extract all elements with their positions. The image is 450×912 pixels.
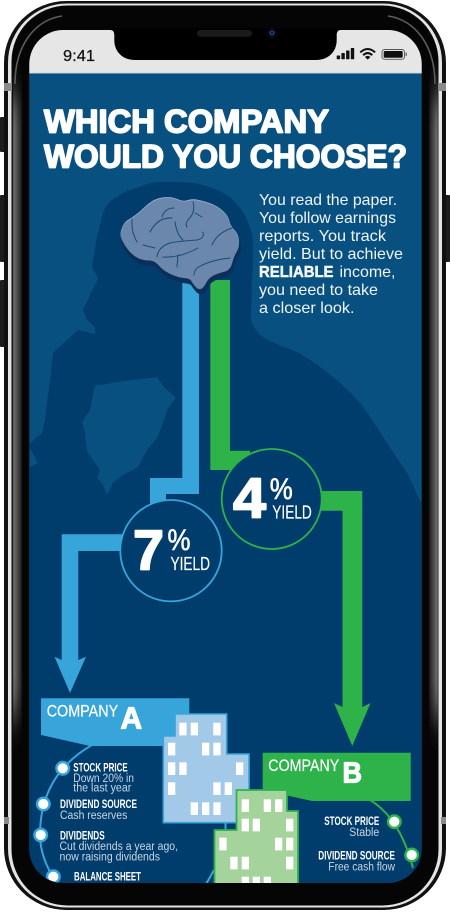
company B timeline nodes <box>388 815 418 861</box>
company A details <box>60 763 178 883</box>
company B details: Stable <box>349 827 379 839</box>
company B details <box>318 816 396 873</box>
7% yield badge: % <box>168 524 190 557</box>
company A connector arc <box>40 745 226 888</box>
building B <box>214 790 298 890</box>
intro text: reports. You track <box>259 228 387 245</box>
speaker <box>197 30 252 37</box>
notch <box>110 28 341 60</box>
company A details: BALANCE SHEET <box>74 871 141 883</box>
company A details: Cash reserves <box>60 810 128 822</box>
brain <box>121 198 240 293</box>
company B banner: B <box>342 757 362 789</box>
title: WOULD YOU CHOOSE? <box>44 139 407 175</box>
title <box>43 108 406 169</box>
silhouette of thinking man <box>28 182 423 884</box>
4% yield badge <box>222 449 322 549</box>
intro text: income, <box>340 264 396 281</box>
company A details: the last year <box>73 782 131 794</box>
company A details: now raising dividends <box>60 852 160 864</box>
company B connector arc <box>370 800 413 868</box>
intro text: a closer look. <box>259 300 354 317</box>
4% yield badge: 4 <box>233 467 266 531</box>
building A <box>163 714 249 823</box>
company A details: STOCK PRICE <box>73 763 128 775</box>
status bar <box>29 30 422 74</box>
intro text: you need to take <box>259 282 378 299</box>
company B details: STOCK PRICE <box>324 816 380 828</box>
company A timeline nodes <box>34 762 69 883</box>
company A banner: COMPANY <box>47 702 118 720</box>
company B banner <box>263 753 411 801</box>
7% yield badge: YIELD <box>170 553 210 574</box>
intro text: yield. But to achieve <box>259 246 403 263</box>
intro text: You follow earnings <box>259 210 396 227</box>
7% yield badge: 7 <box>133 518 164 582</box>
7% yield badge <box>120 500 222 601</box>
camera <box>267 28 277 38</box>
company A details: Cut dividends a year ago, <box>60 841 178 853</box>
signal icon <box>337 48 354 59</box>
green arrow to company B <box>321 491 370 746</box>
green path to 4% yield <box>210 280 250 470</box>
4% yield badge: % <box>270 473 293 506</box>
intro text: RELIABLE <box>259 264 334 281</box>
intro text: You read the paper. <box>259 192 397 209</box>
blue arrow to company A <box>54 534 130 693</box>
company B details: Free cash flow <box>328 861 396 873</box>
title: WHICH COMPANY <box>44 104 329 140</box>
company B details: DIVIDEND SOURCE <box>318 850 395 862</box>
company A banner: A <box>120 702 142 736</box>
company B banner: COMPANY <box>268 757 339 775</box>
wifi icon <box>360 49 375 60</box>
4% yield badge: YIELD <box>272 501 312 522</box>
company A details: DIVIDENDS <box>60 830 105 842</box>
intro text <box>259 192 403 317</box>
company A details: Down 20% in <box>73 773 134 785</box>
clock: 9:41 <box>63 48 95 65</box>
battery icon <box>382 50 407 59</box>
company A details: DIVIDEND SOURCE <box>60 799 137 811</box>
blue path to 7% yield <box>150 280 199 510</box>
company A banner <box>41 698 189 746</box>
